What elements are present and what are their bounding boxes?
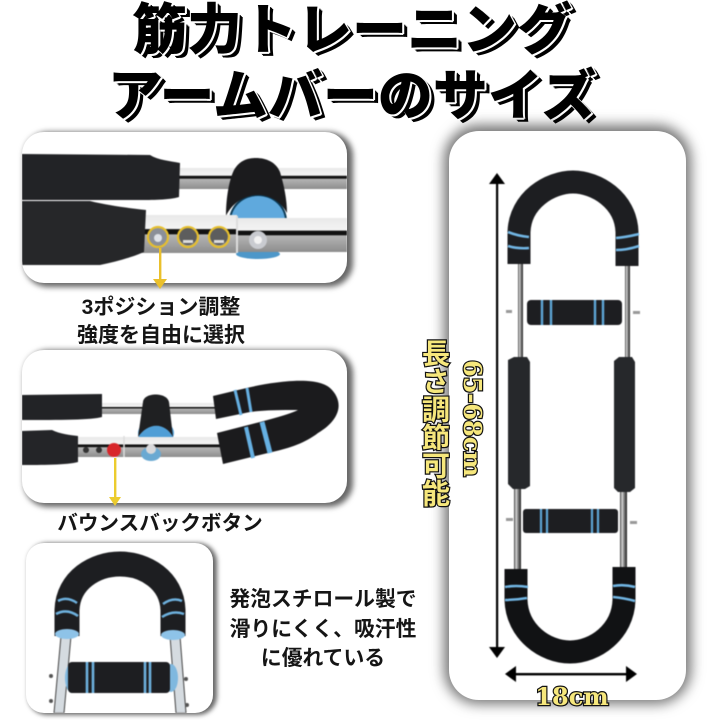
adjustment holes xyxy=(148,227,229,247)
caption: bounce-back button: バウンスバックボタン xyxy=(57,512,263,535)
bolt xyxy=(249,231,267,249)
panel: bounce-back button photo xyxy=(22,350,347,503)
caption: foam description: 滑りにくく、吸汗性 xyxy=(230,618,416,640)
bolts xyxy=(506,310,640,524)
label: width 18cm: 18cm xyxy=(535,682,609,711)
arrow: button to caption xyxy=(109,458,121,506)
upper foam grip xyxy=(527,300,622,325)
foam arch xyxy=(55,564,185,640)
width arrow xyxy=(505,666,637,682)
lower foam grip xyxy=(523,509,618,533)
caption: foam description xyxy=(229,588,417,670)
label: height 65-68cm: 65-68cm xyxy=(458,360,487,477)
left long grip xyxy=(508,357,530,489)
foam U handle xyxy=(213,381,339,464)
arrow: holes to caption xyxy=(153,248,167,289)
caption: 3-position adjustment: 強度を自由に選択 xyxy=(77,324,245,347)
lower rod xyxy=(76,437,222,457)
bottom foam U xyxy=(505,567,635,652)
panel: foam handle photo xyxy=(26,543,213,713)
padded cross handle xyxy=(226,158,287,259)
panel: full product with dimensions xyxy=(449,131,686,700)
caption: 3-position adjustment: 3ポジション調整 xyxy=(82,296,240,319)
lower grip xyxy=(22,430,78,465)
panel: position adjustment photo xyxy=(22,132,347,283)
caption: foam description: に優れている xyxy=(261,647,385,670)
red button xyxy=(107,443,121,457)
height arrow xyxy=(489,173,505,658)
cross handle xyxy=(138,394,174,446)
caption: 3-position adjustment xyxy=(77,296,245,347)
top foam arch xyxy=(508,182,639,266)
lower black grip xyxy=(22,201,146,265)
foam grip xyxy=(65,662,178,693)
title: 筋力トレーニング xyxy=(132,0,572,61)
upper rods xyxy=(514,264,630,570)
holes and bolt xyxy=(83,436,161,461)
caption: foam description: 発泡スチロール製で xyxy=(229,588,417,611)
title xyxy=(108,0,600,127)
title: アームバーのサイズ xyxy=(108,65,596,127)
rods xyxy=(54,636,186,713)
upper black grip xyxy=(22,154,180,200)
upper chrome rod xyxy=(170,168,347,189)
lower chrome rod xyxy=(140,215,347,253)
label: length adjustable: 長さ調節可能 xyxy=(419,339,450,507)
upper rod xyxy=(100,403,218,414)
upper grip xyxy=(22,394,102,420)
bolts xyxy=(49,674,189,707)
right long grip xyxy=(614,357,635,492)
